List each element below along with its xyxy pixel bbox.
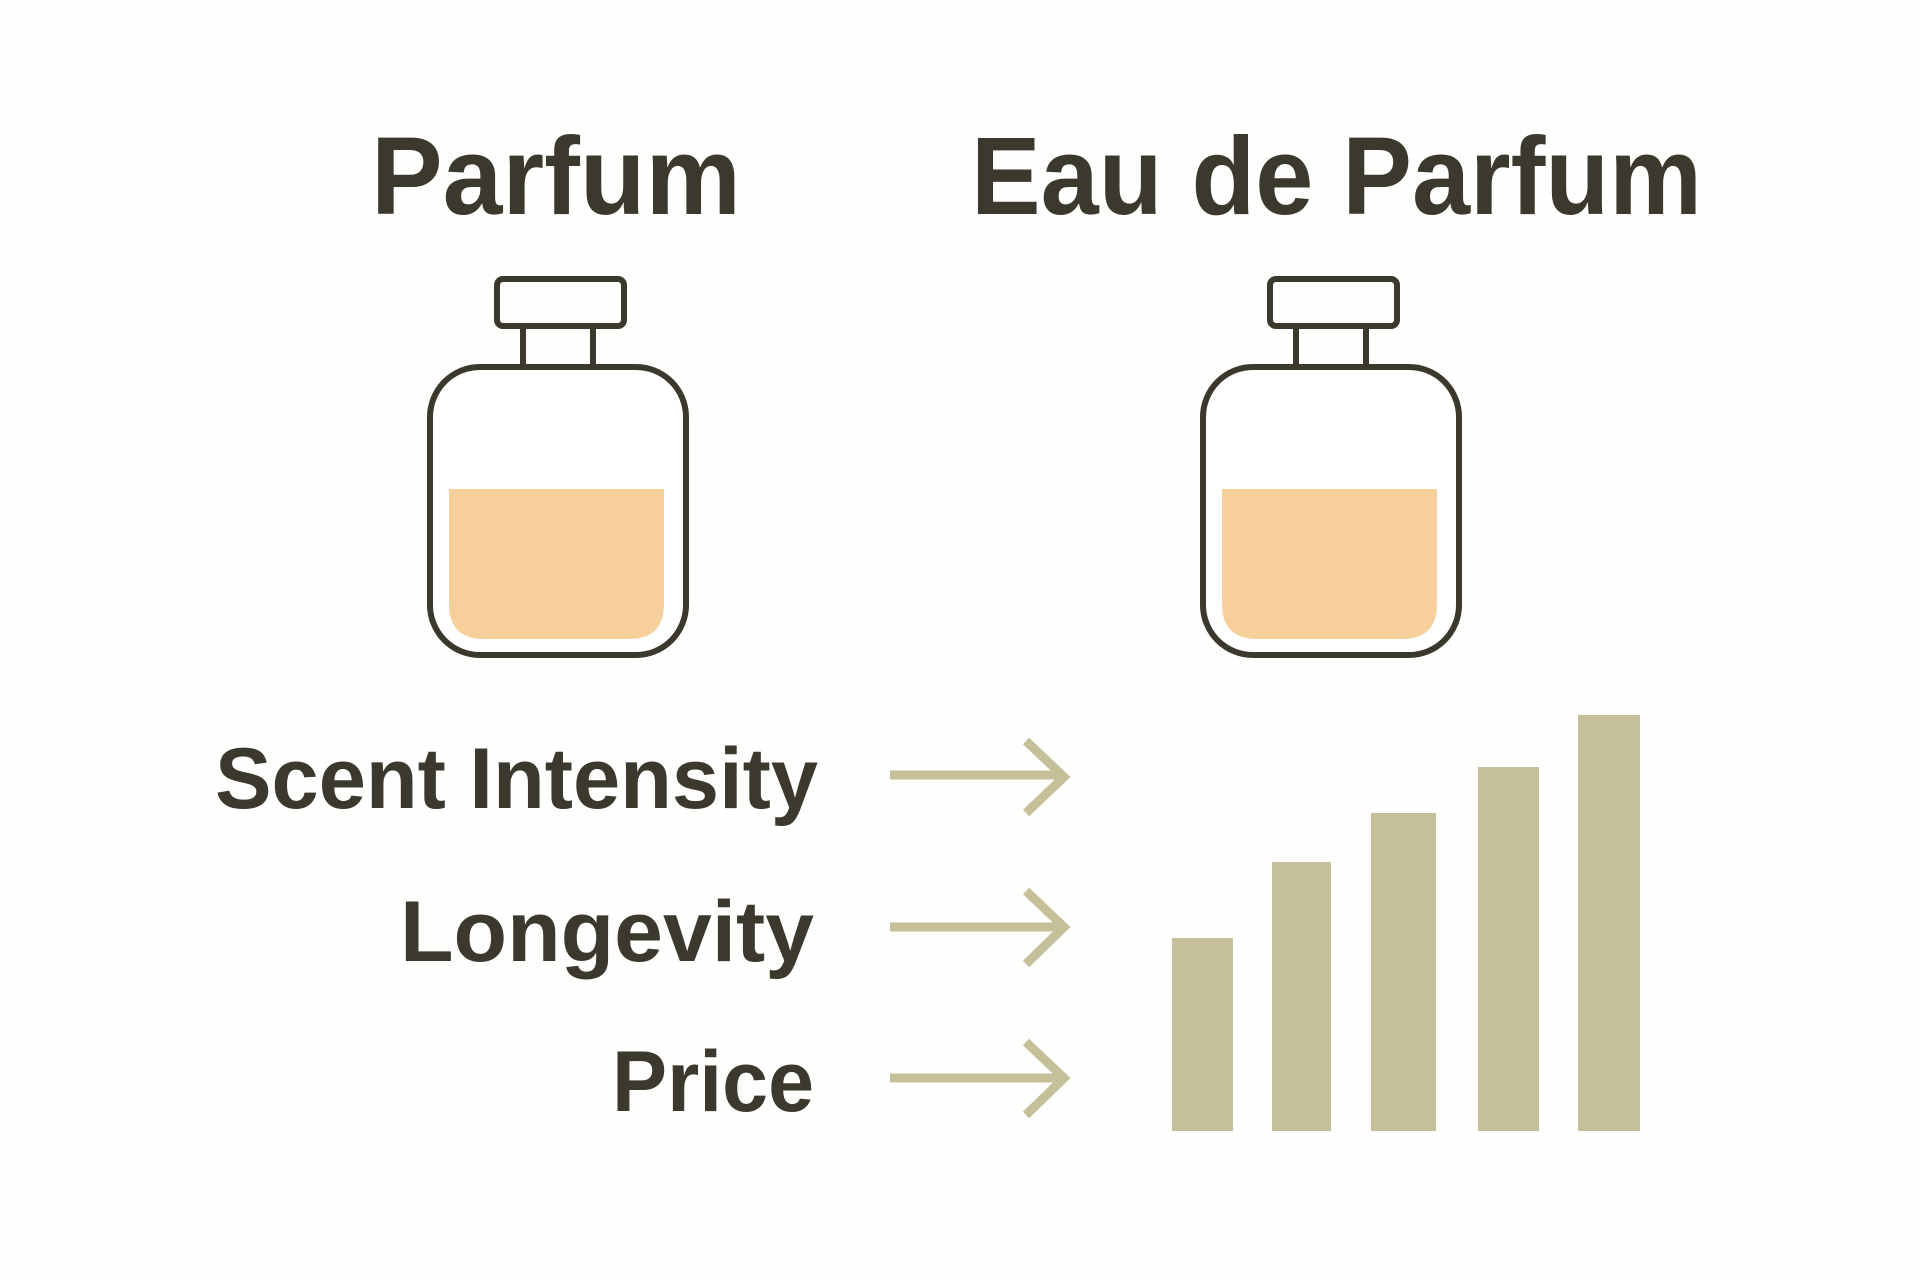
label: Longevity: Longevity bbox=[400, 884, 814, 980]
title: Eau de Parfum: Eau de Parfum bbox=[971, 115, 1702, 238]
icon: parfum bottle bbox=[430, 279, 686, 655]
arrows bbox=[890, 741, 1064, 1115]
bar chart bbox=[1172, 715, 1640, 1131]
label: Scent Intensity: Scent Intensity bbox=[215, 731, 818, 827]
icon: eau de parfum bottle bbox=[1203, 279, 1459, 655]
title: Parfum: Parfum bbox=[371, 115, 741, 238]
label: Price: Price bbox=[612, 1034, 814, 1130]
